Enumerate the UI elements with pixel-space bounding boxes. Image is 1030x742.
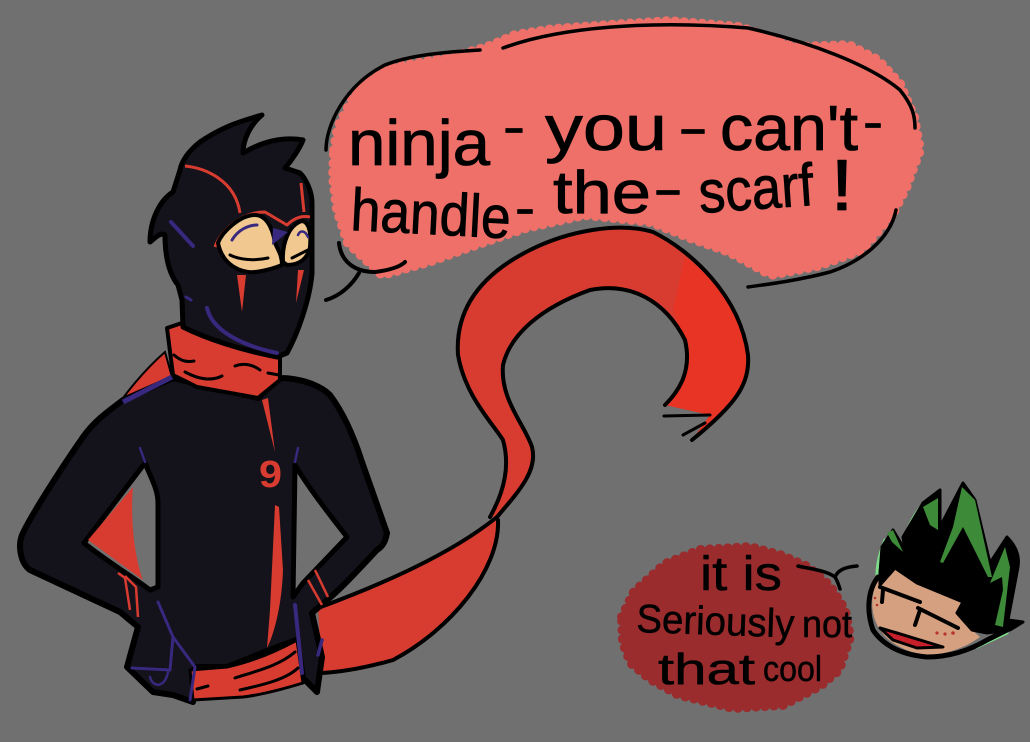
speech text: handle	[349, 176, 513, 251]
speech text: -	[653, 161, 683, 217]
small bubble tail	[798, 566, 857, 589]
bubble fill	[333, 21, 920, 275]
back cape	[123, 352, 172, 398]
jacket zipper stripes	[262, 398, 283, 648]
speech text: scarf	[696, 151, 816, 226]
mask red seams	[185, 166, 310, 247]
speech bubble: ninja	[326, 21, 920, 300]
speech text: ninja	[348, 107, 490, 179]
small bubble text: cool	[763, 648, 822, 689]
scarf bright end	[665, 257, 748, 440]
small bubble text: it is	[700, 548, 782, 601]
body	[20, 378, 387, 702]
eyebrows and eyes	[880, 587, 958, 628]
ninja character	[20, 115, 387, 702]
head and mask	[150, 115, 312, 357]
freckles	[874, 597, 955, 636]
face right	[283, 221, 310, 265]
small speech bubble	[622, 547, 857, 708]
scarf upper section	[458, 228, 748, 517]
shoulder purple band	[123, 377, 172, 402]
scarf ink outlines	[318, 228, 748, 673]
light green rim	[877, 505, 1007, 647]
small bubble text: that	[658, 645, 755, 694]
collar	[167, 323, 280, 398]
speech text	[348, 92, 883, 251]
right arm gap	[293, 465, 347, 597]
speech text: the	[553, 159, 651, 226]
cape behind arm	[88, 487, 143, 580]
mask purple shading	[171, 222, 277, 353]
waist scarf	[190, 640, 303, 700]
mask red cheek stripes	[237, 270, 304, 312]
skin	[872, 568, 980, 655]
speech text: !	[830, 146, 854, 226]
bubble outline strokes	[326, 25, 915, 300]
speech text: -	[503, 99, 525, 155]
mouth	[880, 628, 943, 648]
speech text: -	[863, 94, 883, 150]
scarf lower section	[318, 517, 497, 673]
armpit and glove details	[132, 448, 322, 700]
speech text: -	[678, 100, 708, 156]
small head with green hair	[869, 483, 1023, 657]
green highlights	[887, 487, 1010, 627]
small bubble text: Seriously	[636, 597, 795, 647]
flowing scarf	[318, 228, 748, 673]
mask shape	[150, 115, 312, 357]
left arm gap	[84, 463, 158, 590]
waist scarf folds	[197, 652, 298, 690]
face left	[218, 215, 282, 272]
small bubble fill	[622, 547, 850, 708]
speech text: can't	[720, 92, 858, 164]
nose shadow	[272, 228, 288, 245]
collar folds	[174, 355, 279, 379]
small bubble text: not	[802, 604, 852, 646]
hair	[880, 483, 1023, 633]
head outline	[869, 577, 1007, 657]
eye marks	[230, 225, 308, 260]
number nine: 9	[259, 454, 282, 496]
speech text: you	[545, 92, 667, 164]
neck scarf	[167, 323, 280, 398]
small bubble text	[636, 548, 852, 694]
speech text: -	[515, 180, 535, 236]
wrist stripes	[118, 570, 328, 617]
